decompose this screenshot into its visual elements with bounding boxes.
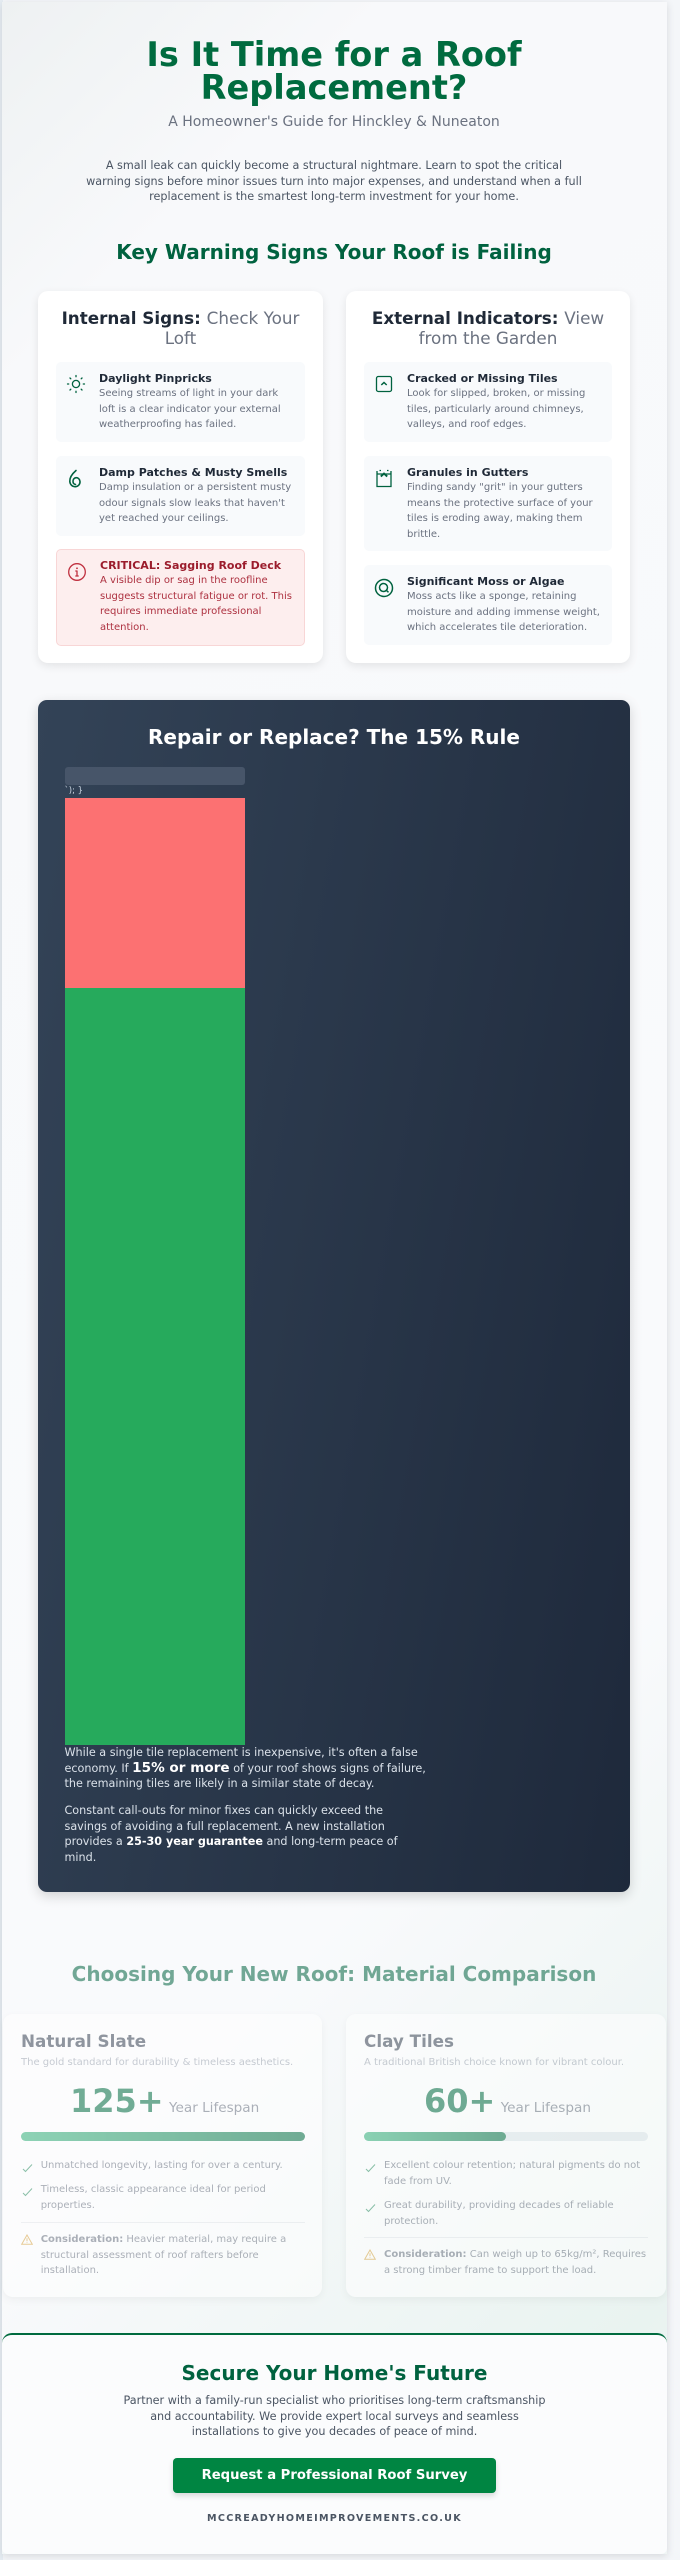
consideration text: structural assessment of roof rafters before xyxy=(41,2250,259,2261)
heading: warning signs: Key Warning Signs Your Roof is Failing xyxy=(116,240,552,264)
icon: check xyxy=(366,2164,376,2172)
pro text: fade from UV. xyxy=(384,2176,452,2187)
icon: check xyxy=(22,2164,32,2172)
text: call-outs: mind. xyxy=(64,1851,96,1864)
title: Replacement? xyxy=(201,68,467,107)
CTA text: and accountability. We provide expert local surveys and seamless xyxy=(150,2410,519,2423)
consideration text xyxy=(41,2234,286,2276)
subtitle: A Homeowner's Guide for Hinckley & Nuneaton xyxy=(168,114,500,130)
pro text xyxy=(40,2184,266,2211)
text: false economy: economy. If 15% or more of your roof shows signs of failure, xyxy=(64,1760,426,1776)
item text: Look for slipped, broken, or missing xyxy=(407,388,585,399)
panel heading xyxy=(62,308,300,348)
item title: Granules in Gutters xyxy=(407,466,528,479)
item text: valleys, and roof edges. xyxy=(407,419,526,430)
item text xyxy=(99,388,281,430)
item: granules in gutters xyxy=(364,456,612,551)
item text: A visible dip or sag in the roofline xyxy=(100,575,268,586)
panel heading: External Indicators: View xyxy=(372,308,604,328)
title xyxy=(146,35,522,107)
item title: Cracked or Missing Tiles xyxy=(407,372,558,385)
panel: repair or replace xyxy=(38,700,630,1892)
panel heading: Internal Signs: Check Your xyxy=(62,308,299,328)
icon: check xyxy=(366,2204,376,2212)
text: call-outs xyxy=(64,1804,398,1864)
consideration text: installation. xyxy=(41,2265,99,2276)
text: false economy: the remaining tiles are likely in a similar state of decay. xyxy=(64,1777,374,1790)
item text: loft is a clear indicator your external xyxy=(99,404,281,415)
item: daylight pinpricks xyxy=(56,362,305,442)
pros list xyxy=(366,2160,640,2227)
item: moss or algae xyxy=(364,565,612,645)
CTA text: installations to give you decades of peace of mind. xyxy=(192,2425,477,2438)
icon: info xyxy=(68,563,86,581)
stacked bar xyxy=(65,798,245,1745)
lifespan bar xyxy=(21,2132,305,2141)
CTA text xyxy=(124,2394,545,2438)
panel heading xyxy=(372,308,604,348)
consideration text xyxy=(384,2249,646,2276)
pro text: Timeless, classic appearance ideal for period xyxy=(41,2184,266,2195)
item text: which accelerates tile deterioration. xyxy=(407,622,587,633)
item text xyxy=(407,388,585,430)
lifespan bar fill xyxy=(364,2132,506,2141)
item: damp patches xyxy=(56,456,305,536)
item text: tiles is eroding away, making them xyxy=(407,513,583,524)
item text: attention. xyxy=(100,622,149,633)
pro text: protection. xyxy=(384,2216,438,2227)
CTA button xyxy=(173,2458,496,2493)
lifespan bar xyxy=(364,2132,648,2141)
text: call-outs: Constant call-outs for minor fixes can quickly exceed the xyxy=(64,1804,383,1817)
icon: gutter xyxy=(376,470,392,488)
pro text xyxy=(384,2200,614,2227)
lifespan label: Year Lifespan xyxy=(169,2100,259,2116)
heading: Choosing Your New Roof: Material Comparison xyxy=(72,1962,596,1986)
icon: moss xyxy=(374,578,394,598)
item title: CRITICAL: Sagging Roof Deck xyxy=(100,559,281,572)
item text: brittle. xyxy=(407,529,440,540)
item text: moisture and adding immense weight, xyxy=(407,607,600,618)
intro text: replacement is the smartest long-term investment for your home. xyxy=(149,190,519,203)
material description: The gold standard for durability & timeless aesthetics. xyxy=(21,2057,293,2068)
panel heading: from the Garden xyxy=(419,328,557,348)
lifespan figure: 125+ xyxy=(70,2082,164,2120)
intro text xyxy=(86,159,582,203)
item title: Damp Patches & Musty Smells xyxy=(99,466,287,479)
CTA heading: Secure Your Home's Future xyxy=(182,2361,487,2385)
item text: Damp insulation or a persistent musty xyxy=(99,482,291,493)
CTA button: Request a Professional Roof Survey xyxy=(202,2468,467,2483)
material name: Clay Tiles xyxy=(364,2031,454,2051)
item title: Daylight Pinpricks xyxy=(99,372,212,385)
intro text: A small leak can quickly become a structural nightmare. Learn to spot the critical xyxy=(106,159,562,172)
item text: weatherproofing has failed. xyxy=(99,419,236,430)
icon: warning xyxy=(364,2249,376,2260)
item text xyxy=(407,591,600,633)
consideration text: Consideration: Can weigh up to 65kg/m², Requires xyxy=(384,2249,646,2260)
intro text: warning signs before minor issues turn into major expenses, and understand when a full xyxy=(86,175,582,188)
item text: yet reached your ceilings. xyxy=(99,513,229,524)
item text: Moss acts like a sponge, retaining xyxy=(407,591,576,602)
consideration text: Consideration: Heavier material, may require a xyxy=(41,2234,286,2245)
item text: tiles, particularly around chimneys, xyxy=(407,404,584,415)
pros list xyxy=(22,2160,283,2211)
website: MCCREADYHOMEIMPROVEMENTS.CO.UK xyxy=(207,2513,462,2524)
item text: odour signals slow leaks that haven't xyxy=(99,498,285,509)
text: false economy xyxy=(64,1746,426,1790)
consideration text: a strong timber frame to support the load. xyxy=(384,2265,596,2276)
chart placeholder bar xyxy=(64,767,244,785)
pro text: properties. xyxy=(41,2200,95,2211)
item: cracked tiles xyxy=(364,362,612,442)
panel: internal signs xyxy=(38,291,323,663)
pro text: Excellent colour retention; natural pigments do not xyxy=(384,2160,640,2171)
panel heading: Repair or Replace? The 15% Rule xyxy=(148,725,520,749)
item: critical sagging roof deck xyxy=(56,549,305,646)
panel: clay tiles xyxy=(346,2014,666,2297)
icon: tile xyxy=(376,376,392,392)
icon: sun xyxy=(66,374,86,394)
panel: external indicators xyxy=(346,291,630,663)
panel: call to action xyxy=(2,2333,667,2554)
panel: natural slate xyxy=(3,2014,322,2297)
consideration xyxy=(21,2222,305,2293)
lifespan figure: 60+ xyxy=(424,2082,495,2120)
text: call-outs: savings of avoiding a full replacement. A new installation xyxy=(64,1820,385,1833)
stray code text: `); } xyxy=(64,786,83,796)
material description: A traditional British choice known for vibrant colour. xyxy=(364,2057,624,2068)
title: Is It Time for a Roof xyxy=(146,35,522,74)
item text: Finding sandy "grit" in your gutters xyxy=(407,482,583,493)
text: false economy: While a single tile replacement is inexpensive, it's often a false xyxy=(64,1746,418,1759)
panel heading: Loft xyxy=(165,328,196,348)
item text xyxy=(407,482,593,540)
consideration xyxy=(364,2237,648,2293)
material name: Natural Slate xyxy=(21,2031,146,2051)
pro text: Unmatched longevity, lasting for over a century. xyxy=(41,2160,283,2171)
icon: warning xyxy=(21,2234,33,2245)
item text xyxy=(100,575,292,633)
item text: suggests structural fatigue or rot. This xyxy=(100,591,292,602)
bar segment: green xyxy=(64,988,244,1745)
item text: means the protective surface of your xyxy=(407,498,593,509)
item text xyxy=(99,482,291,524)
item text: Seeing streams of light in your dark xyxy=(99,388,278,399)
item text: requires immediate professional xyxy=(100,606,261,617)
icon: drop xyxy=(69,470,81,488)
item title: Significant Moss or Algae xyxy=(407,575,564,588)
lifespan label: Year Lifespan xyxy=(501,2100,591,2116)
text: call-outs: provides a 25-30 year guarantee and long-term peace of xyxy=(64,1835,398,1848)
CTA text: Partner with a family-run specialist who prioritises long-term craftsmanship xyxy=(124,2394,545,2407)
pro text: Great durability, providing decades of reliable xyxy=(384,2200,614,2211)
pro text xyxy=(384,2160,640,2187)
section: material comparison xyxy=(21,1962,666,2297)
icon: check xyxy=(22,2188,32,2196)
bar segment: red xyxy=(64,798,244,988)
